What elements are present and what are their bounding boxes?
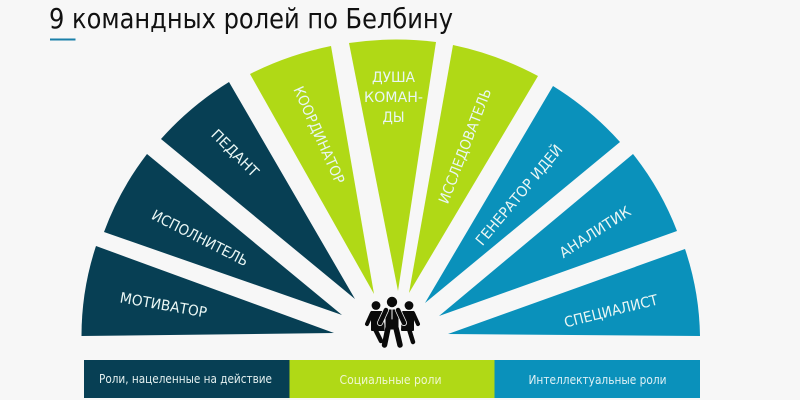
segment: аналитик: АНАЛИТИК [557,203,635,262]
legend bar [84,360,700,398]
legend: action roles: Роли, нацеленные на действие [99,372,272,386]
segment: душа команды: КОМАН- [364,90,423,106]
segment: душа команды [349,40,436,291]
right person [402,301,418,342]
legend: action roles [84,360,290,398]
segment: генератор идей [425,86,620,303]
segment: педант: ПЕДАНТ [207,127,261,181]
segment: исполнитель: ИСПОЛНИТЕЛЬ [149,208,250,270]
segment: педант [161,82,355,299]
legend: social roles: Социальные роли [340,373,442,387]
title underline [50,38,76,40]
segment: генератор идей: ГЕНЕРАТОР ИДЕЙ [472,141,566,249]
semicircle of role segments [81,40,700,336]
segment: координатор: КООРДИНАТОР [289,84,347,187]
segment: специалист [448,249,700,336]
segment: координатор [250,46,374,294]
left person [367,301,384,341]
segment: аналитик [439,154,677,316]
segment: исследователь [409,45,538,293]
legend: intellectual roles [494,360,700,398]
segment: исполнитель [104,154,342,315]
segment: душа команды: ДУША [372,70,415,86]
segment: мотиватор: МОТИВАТОР [119,290,208,322]
icon: group of people [367,297,418,345]
title: 9 командных ролей по Белбину [49,3,453,35]
centre person [380,297,404,345]
segment: исследователь: ИССЛЕДОВАТЕЛЬ [437,87,495,206]
segment: душа команды: ДЫ [382,110,404,126]
legend: social roles [290,360,494,398]
segment: специалист: СПЕЦИАЛИСТ [563,293,660,331]
segment: мотиватор [81,246,334,336]
legend: intellectual roles: Интеллектуальные роли [528,373,666,387]
